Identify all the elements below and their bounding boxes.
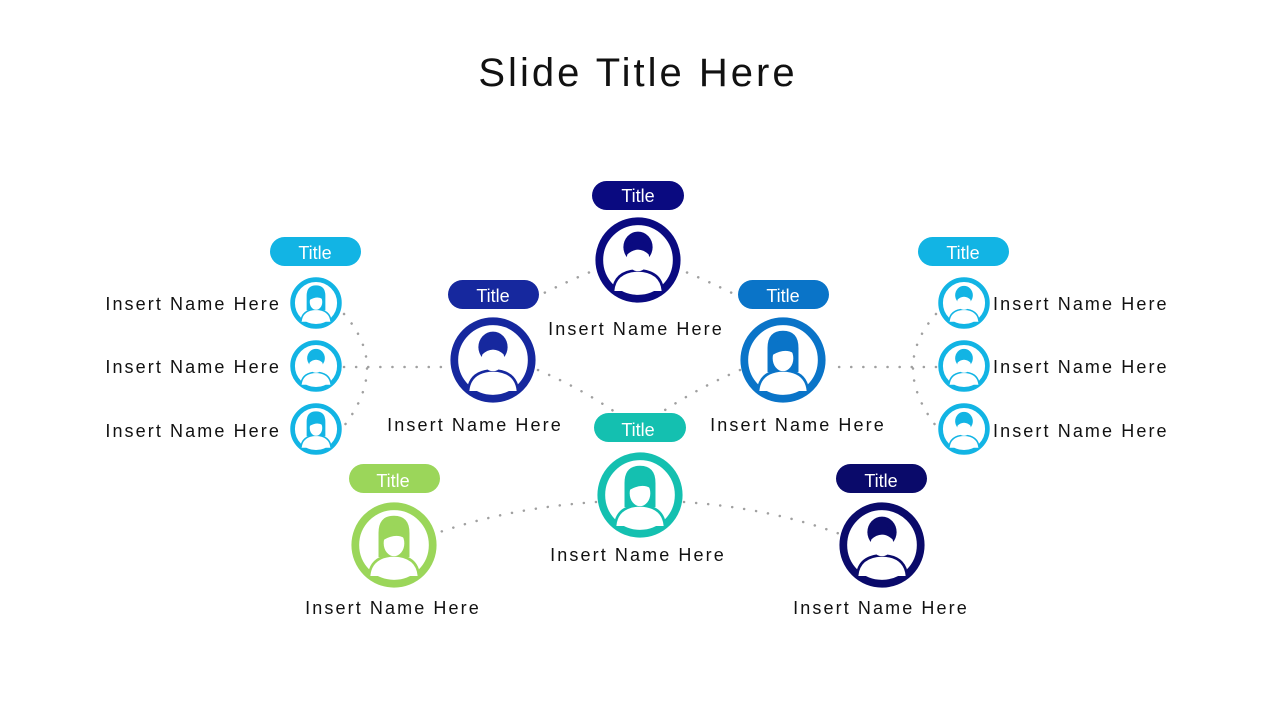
node: bottom right (793, 464, 969, 618)
group: left small: Insert Name Here (105, 357, 281, 377)
group: left small (105, 237, 361, 452)
group: right small: Insert Name Here (993, 294, 1169, 314)
group: right small (918, 237, 1169, 452)
group: left small: Insert Name Here (105, 294, 281, 314)
group: left small: Title (298, 243, 332, 263)
node: bottom left (305, 464, 481, 618)
node: bottom left: Title (376, 471, 410, 491)
node: top (548, 181, 724, 339)
node: bottom right: Insert Name Here (793, 598, 969, 618)
group: left small: Insert Name Here (105, 421, 281, 441)
node: bottom left: Insert Name Here (305, 598, 481, 618)
node: left mid: Title (476, 286, 510, 306)
node: left mid (387, 280, 563, 435)
node: top: Title (621, 186, 655, 206)
node: bottom right: Title (864, 471, 898, 491)
node: center bottom (550, 413, 726, 565)
group: right small: Insert Name Here (993, 421, 1169, 441)
connectors (344, 268, 936, 534)
title: Slide Title Here (478, 51, 798, 95)
group: right small: Title (946, 243, 980, 263)
node: right mid: Insert Name Here (710, 415, 886, 435)
node: center bottom: Insert Name Here (550, 545, 726, 565)
node: right mid: Title (766, 286, 800, 306)
node: right mid (710, 280, 886, 435)
node: left mid: Insert Name Here (387, 415, 563, 435)
group: right small: Insert Name Here (993, 357, 1169, 377)
node: center bottom: Title (621, 420, 655, 440)
node: top: Insert Name Here (548, 319, 724, 339)
